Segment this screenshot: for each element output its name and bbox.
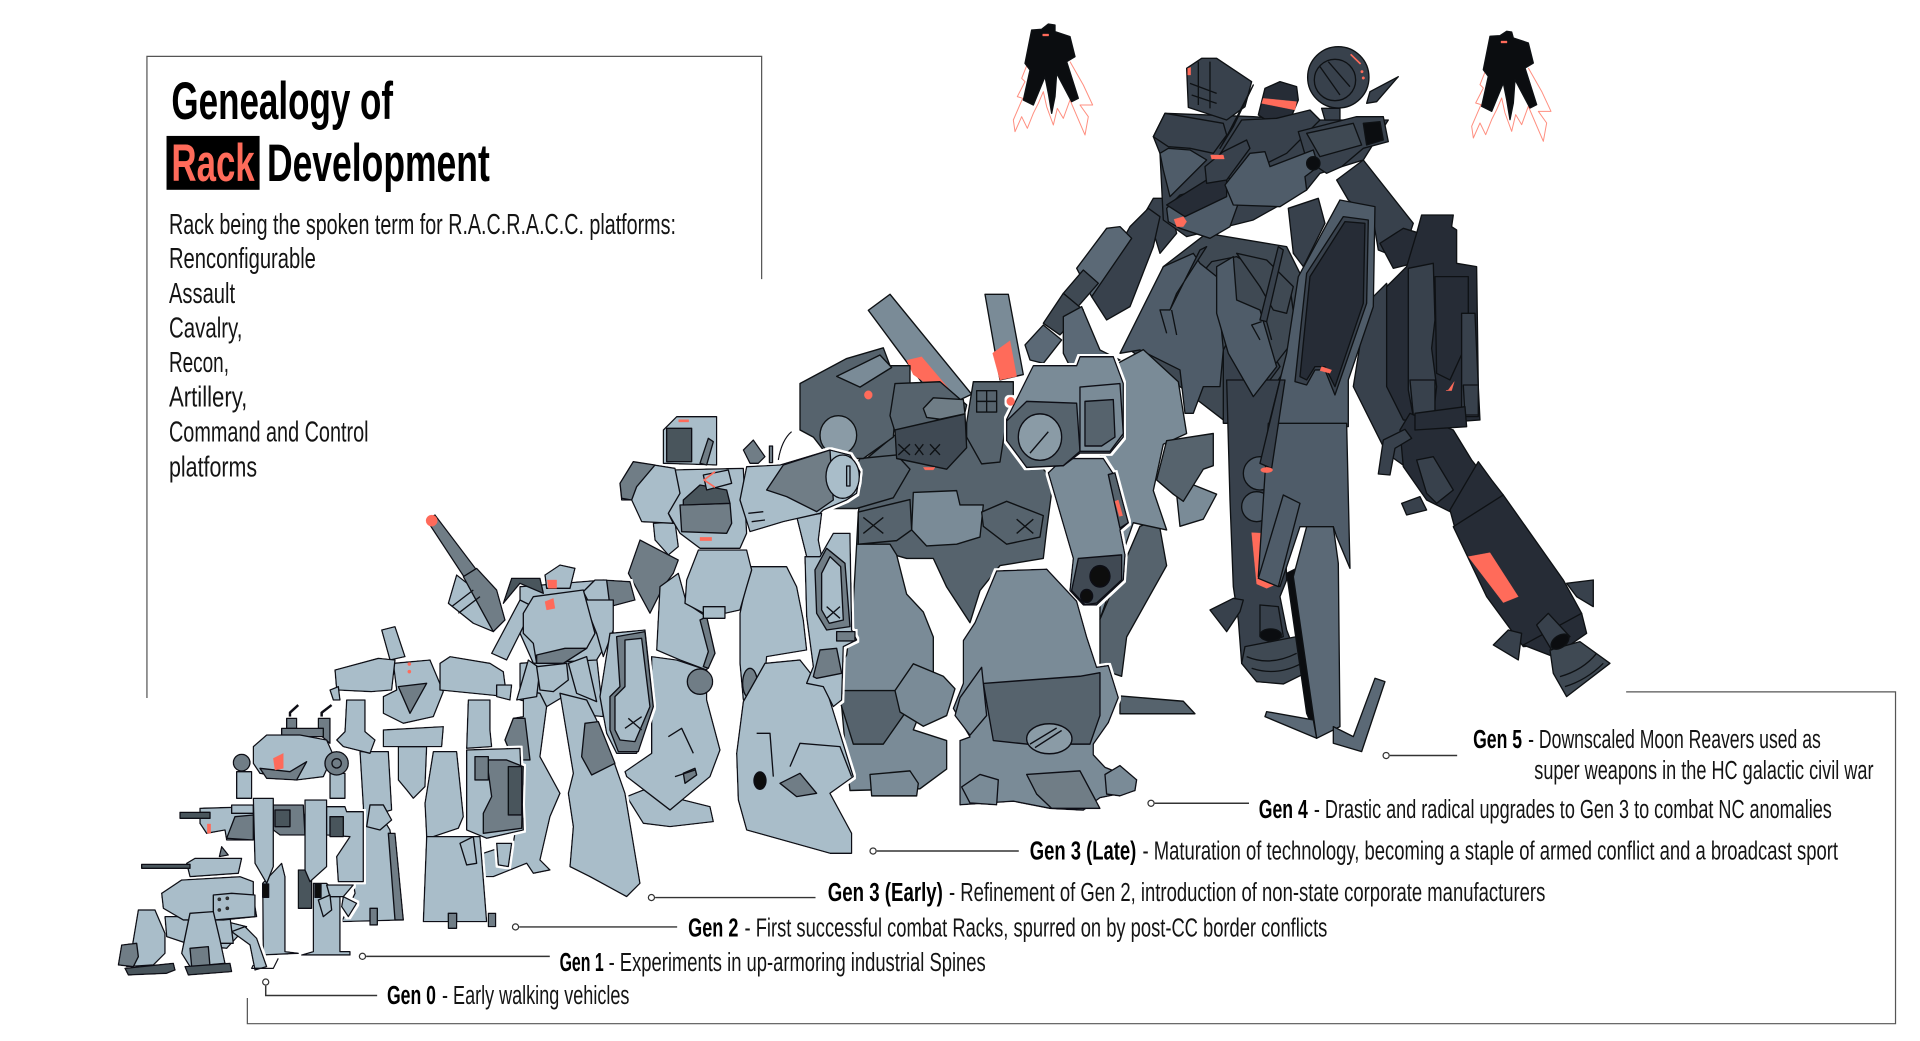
label: Gen 2 (688, 913, 1327, 943)
label: Gen 2: - First successful combat Racks, spurred on by post-CC border conflicts (744, 913, 1327, 943)
text block: definition (169, 209, 676, 483)
late left shoulder (620, 462, 680, 523)
label: Gen 1: - Experiments in up-armoring industrial Spines (609, 947, 986, 977)
gen 1 antennas (282, 705, 332, 743)
robot: Gen 5 (1025, 47, 1610, 752)
late head pack (663, 417, 717, 465)
label: Gen 3 Early (828, 877, 1545, 907)
early torso (517, 565, 597, 702)
leader: Gen 3 Late (870, 848, 1019, 854)
gen 2 top pack (382, 627, 405, 660)
title: Development (267, 134, 490, 193)
gen 1 gun (180, 807, 253, 840)
label: Gen 0 (387, 980, 629, 1010)
panel frame: legend box (247, 692, 1896, 1024)
robot: Gen 4 (800, 294, 1053, 796)
gen 2 arms (337, 700, 492, 753)
gen 2 torso (380, 660, 443, 747)
robot: Gen 4 back wing (1100, 350, 1217, 714)
label: Gen 3 Late: Gen 3 (Late) (1030, 836, 1136, 866)
gen 0 hull (162, 877, 257, 943)
gen 5 back leg and thruster (1210, 380, 1305, 684)
leader: Gen 3 Early (648, 894, 816, 901)
label: Gen 3 Early: Gen 3 (Early) (828, 877, 943, 907)
text block: definition: Rack being the spoken term for R.A.C.R.A.C.C. platforms: (169, 209, 676, 241)
gen 2 side pack (460, 748, 523, 867)
label: Gen 0: - Early walking vehicles (442, 980, 629, 1010)
text block: definition: Artillery, (169, 382, 247, 414)
title: Genealogy of (171, 72, 393, 131)
text block: definition: Renconfigurable (169, 243, 316, 275)
robot: Gen 1 (180, 705, 363, 955)
label: Gen 2: Gen 2 (688, 913, 738, 943)
robot: Gen 3 Late (620, 417, 860, 853)
leader: Gen 1 (359, 953, 550, 959)
leader: Gen 5 (1383, 752, 1457, 759)
text block: definition: Cavalry, (169, 312, 242, 344)
gen 1 arms (232, 772, 345, 813)
text block: definition: Command and Control (169, 416, 369, 448)
early arms and shoulders (492, 578, 635, 663)
leader: Gen 2 (512, 924, 677, 930)
gen 5 backpack and gatling (1387, 215, 1480, 423)
gen 5 left gun arm (1025, 198, 1177, 373)
gen 1 shield and claws (318, 807, 363, 917)
leader: Gen 4 (1148, 800, 1249, 806)
gen 5 torso and skirt (1120, 47, 1398, 413)
text block: definition: platforms (169, 451, 257, 483)
title (167, 72, 490, 193)
robot: Gen 4 front leg and arm (953, 357, 1137, 810)
late torso (668, 468, 752, 618)
gen 4 gun arm (1048, 458, 1128, 605)
gen 0 rear leg (210, 920, 278, 970)
late right shoulder (740, 450, 860, 532)
text block: definition: Assault (169, 278, 235, 310)
robot: Gen 2 (330, 627, 523, 928)
gen 5 back parts (1130, 160, 1433, 487)
label: Gen 0: Gen 0 (387, 980, 436, 1010)
late antenna and cannon (743, 432, 792, 463)
panel frame: title box (147, 56, 762, 698)
text block: definition: Recon, (169, 347, 229, 379)
early shield (582, 630, 653, 775)
gen 0 turret (142, 847, 242, 877)
gen 4 front leg (953, 569, 1137, 810)
late side gun (805, 533, 857, 707)
leader: Gen 0 (263, 979, 377, 996)
label: Gen 1 (560, 947, 986, 977)
label: Gen 5: Gen 5 (1473, 724, 1522, 754)
robot: Gen 3 Early (426, 515, 653, 897)
icon: flying silhouette right (1472, 31, 1551, 141)
gen 5 shield lower and front leg (1258, 380, 1385, 752)
gen 5 gun arm lower (1378, 380, 1610, 697)
label: Gen 3 Early: - Refinement of Gen 2, introduction of non-state corporate manufacturers (949, 877, 1545, 907)
early launcher (426, 515, 505, 632)
late rear skirt and legs (625, 513, 853, 853)
gen 4 left and centre (800, 294, 1053, 796)
gen 5 shield upper (1268, 200, 1375, 427)
gen 0 pods (118, 910, 232, 975)
title: Rack (171, 134, 255, 193)
gen 1 body (253, 798, 350, 955)
robot: Gen 0 (118, 847, 278, 975)
gen 1 head (233, 735, 348, 780)
gen 2 legs (342, 747, 496, 928)
early legs (483, 657, 640, 897)
icon: flying silhouette left (1013, 24, 1093, 135)
gen 4 right shoulder (1007, 357, 1123, 467)
label: Gen 5 (1473, 724, 1874, 785)
gen 2 shoulders (330, 657, 512, 700)
label: Gen 1: Gen 1 (560, 947, 604, 977)
label: Gen 4: Gen 4 (1259, 794, 1308, 824)
